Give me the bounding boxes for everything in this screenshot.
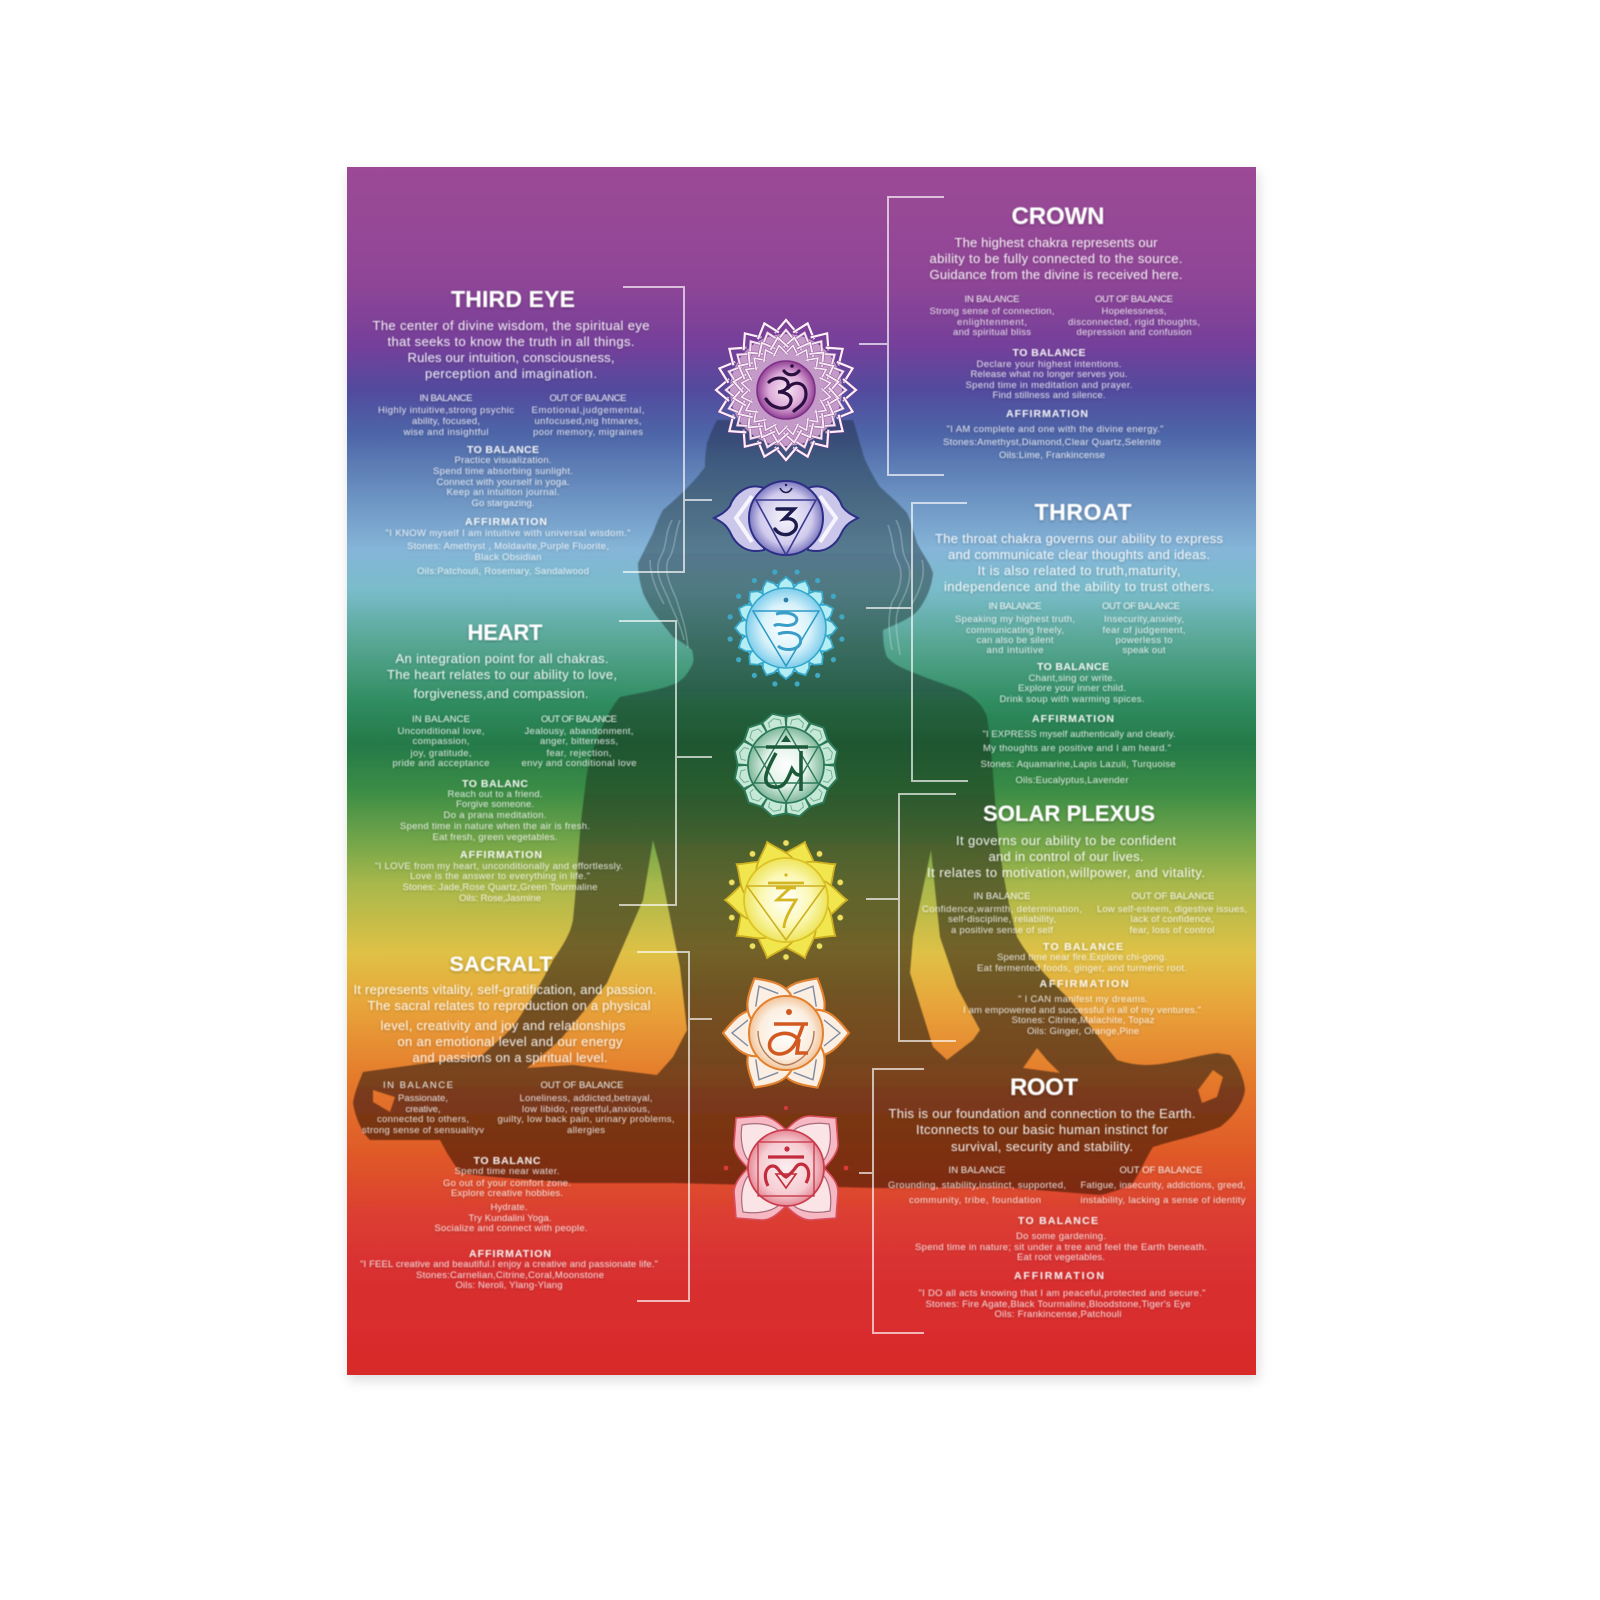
text: root affirmation — [918, 1270, 1206, 1320]
text: throat in balance — [955, 601, 1075, 656]
heading: root: ROOT — [1010, 1074, 1078, 1101]
text: solar plexus to balance: Eat fermented foods, ginger, and turmeric root. — [977, 963, 1187, 974]
text: solar plexus to balance: Spend time near fire.Explore chi-gong. — [997, 952, 1167, 963]
icon: third eye chakra — [714, 481, 858, 555]
text: solar plexus to balance: TO BALANCE — [1043, 941, 1123, 953]
text: crown out of balance: depression and confusion — [1076, 327, 1192, 338]
text: third eye in balance: wise and insightful — [402, 427, 488, 438]
heading: third eye: THIRD EYE — [451, 286, 575, 312]
text: sacral to balance: Explore creative hobbies. — [451, 1188, 563, 1199]
text: root in balance: community, tribe, foundation — [909, 1195, 1041, 1206]
text: solar plexus description: It relates to motivation,willpower, and vitality. — [927, 865, 1205, 880]
text: crown to balance: Declare your highest intentions. — [976, 359, 1122, 370]
text: crown affirmation: AFFIRMATION — [1006, 408, 1088, 420]
text: crown in balance: Strong sense of connection, — [930, 306, 1054, 317]
text: third eye description: that seeks to know the truth in all things. — [388, 334, 634, 349]
text: sacral description: The sacral relates to reproduction on a physical — [368, 998, 651, 1013]
text: heart in balance: IN BALANCE — [412, 714, 470, 725]
text: throat in balance: can also be silent — [976, 635, 1054, 646]
text: root in balance — [888, 1165, 1066, 1206]
text: solar plexus description: and in control of our lives. — [988, 849, 1144, 864]
text: sacral description: It represents vitality, self-gratification, and passion. — [354, 982, 656, 997]
text: heart description: forgiveness,and compassion. — [414, 686, 588, 701]
text: crown in balance — [930, 294, 1054, 338]
text: throat affirmation: Oils:Eucalyptus,Lavender — [1016, 775, 1128, 786]
text: third eye out of balance: OUT OF BALANCE — [550, 393, 626, 404]
text: solar plexus out of balance: Low self-esteem, digestive issues, — [1097, 904, 1247, 915]
text: throat description: and communicate clear thoughts and ideas. — [948, 547, 1210, 562]
text: throat affirmation: Stones: Aquamarine,Lapis Lazuli, Turquoise — [980, 759, 1176, 770]
text: heart to balance: Reach out to a friend. — [448, 789, 542, 800]
text: heart in balance: joy, gratitude, — [410, 748, 472, 759]
text: sacral to balance: Go out of your comfort zone. — [443, 1178, 571, 1189]
text: crown to balance: Release what no longer serves you. — [970, 369, 1128, 380]
text: root description: Itconnects to our basic human instinct for — [916, 1122, 1169, 1137]
text: root out of balance: instability, lacking a sense of identity — [1080, 1195, 1246, 1206]
text: throat out of balance: fear of judgement, — [1102, 625, 1186, 636]
text: throat affirmation: My thoughts are positive and I am heard." — [983, 743, 1171, 754]
text: throat affirmation: AFFIRMATION — [1032, 713, 1114, 725]
text: solar plexus in balance: a positive sense of self — [951, 925, 1053, 936]
text: throat to balance — [1000, 661, 1144, 705]
text: throat out of balance: OUT OF BALANCE — [1102, 601, 1180, 612]
text: heart affirmation: Stones: Jade,Rose Quartz,Green Tourmaline — [402, 882, 598, 893]
text: throat to balance: Explore your inner child. — [1018, 683, 1126, 694]
text: root description — [888, 1106, 1196, 1154]
text: heart out of balance: Jealousy, abandonment, — [524, 726, 634, 737]
text: third eye description: perception and imagination. — [425, 366, 597, 381]
text: crown in balance: enlightenment, — [957, 317, 1027, 328]
text: solar plexus affirmation: AFFIRMATION — [1040, 978, 1128, 990]
text: heart in balance: compassion, — [412, 736, 470, 747]
text: throat description: independence and the ability to trust others. — [944, 579, 1214, 594]
text: heart to balance: Eat fresh, green vegetables. — [432, 832, 558, 843]
text: sacral out of balance — [498, 1080, 674, 1136]
text: crown description: Guidance from the divine is received here. — [930, 267, 1182, 282]
icon: heart chakra — [732, 711, 840, 819]
text: throat in balance: and intuitive — [986, 645, 1044, 656]
text: root in balance: Grounding, stability,instinct, supported, — [888, 1180, 1066, 1191]
text: throat out of balance: Insecurity,anxiety, — [1104, 614, 1184, 625]
text: throat description — [935, 531, 1224, 594]
text: third eye to balance: TO BALANCE — [467, 444, 539, 456]
text: third eye affirmation: Oils:Patchouli, Rosemary, Sandalwood — [417, 566, 589, 577]
text: third eye out of balance: Emotional,judgemental, — [532, 405, 644, 416]
text: heart affirmation: "I LOVE from my heart, unconditionally and effortlessly. — [375, 861, 623, 872]
text: sacral affirmation: Stones:Carnelian,Citrine,Coral,Moonstone — [416, 1270, 604, 1281]
text: sacral in balance: IN BALANCE — [383, 1080, 453, 1091]
text: root affirmation: AFFIRMATION — [1014, 1270, 1104, 1282]
text: third eye in balance: IN BALANCE — [420, 393, 472, 404]
text: heart to balance — [400, 778, 590, 843]
text: third eye affirmation — [386, 516, 630, 577]
text: solar plexus out of balance: OUT OF BALANCE — [1132, 891, 1214, 902]
text: third eye to balance: Spend time absorbing sunlight. — [433, 466, 573, 477]
text: throat in balance: communicating freely, — [966, 625, 1064, 636]
text: throat description: It is also related to truth,maturity, — [978, 563, 1180, 578]
text: heart out of balance: envy and conditional love — [522, 758, 636, 769]
text: solar plexus out of balance: fear, loss of control — [1130, 925, 1214, 936]
text: solar plexus affirmation: Oils: Ginger, Orange,Pine — [1027, 1026, 1139, 1037]
text: solar plexus out of balance — [1097, 891, 1247, 936]
text: sacral to balance: Spend time near water. — [454, 1166, 560, 1177]
text: sacral in balance: connected to others, — [377, 1114, 469, 1125]
text: sacral affirmation: "I FEEL creative and beautiful.I enjoy a creative and passionate life." — [360, 1259, 658, 1270]
text: third eye to balance — [433, 444, 573, 509]
text: sacral out of balance: allergies — [567, 1125, 605, 1136]
text: heart to balance: Forgive someone. — [456, 799, 534, 810]
text: root affirmation: Oils: Frankincense,Patchouli — [994, 1309, 1122, 1320]
text: solar plexus to balance — [977, 941, 1187, 974]
text: solar plexus in balance: Confidence,warmth, determination, — [922, 904, 1082, 915]
icon: root chakra — [724, 1106, 848, 1230]
text: sacral to balance: Hydrate. — [490, 1202, 528, 1213]
text: third eye description — [372, 318, 650, 381]
panel: crown — [930, 203, 1200, 461]
text: root to balance: TO BALANCE — [1018, 1215, 1098, 1227]
text: root to balance: Do some gardening. — [1016, 1231, 1106, 1242]
text: crown description: ability to be fully connected to the source. — [930, 251, 1182, 266]
text: heart affirmation: Love is the answer to everything in life." — [410, 871, 590, 882]
text: third eye in balance: ability, focused, — [412, 416, 480, 427]
text: root to balance — [915, 1215, 1207, 1263]
text: heart in balance: pride and acceptance — [392, 758, 490, 769]
text: sacral out of balance: Loneliness, addicted,betrayal, — [520, 1093, 652, 1104]
text: third eye to balance: Practice visualization. — [454, 455, 552, 466]
panel: heart — [375, 620, 636, 904]
text: solar plexus in balance: IN BALANCE — [974, 891, 1030, 902]
text: third eye description: Rules our intuition, consciousness, — [408, 350, 614, 365]
text: solar plexus affirmation: " I CAN manifest my dreams. — [1018, 994, 1148, 1005]
text: root to balance: Eat root vegetables. — [1017, 1252, 1105, 1263]
text: sacral affirmation: Oils: Neroli, Ylang-Ylang — [456, 1280, 562, 1291]
text: throat description: The throat chakra governs our ability to express — [935, 531, 1224, 546]
text: sacral to balance: Try Kundalini Yoga. — [468, 1213, 552, 1224]
text: heart out of balance: OUT OF BALANCE — [541, 714, 617, 725]
text: throat to balance: Drink soup with warming spices. — [1000, 694, 1144, 705]
text: root description: This is our foundation and connection to the Earth. — [888, 1106, 1196, 1121]
text: third eye to balance: Connect with yourself in yoga. — [436, 477, 570, 488]
text: heart to balance: Do a prana meditation. — [444, 810, 546, 821]
heading: heart: HEART — [468, 620, 543, 645]
text: crown affirmation: "I AM complete and one with the divine energy." — [946, 424, 1164, 435]
text: solar plexus description: It governs our ability to be confident — [956, 833, 1176, 848]
text: solar plexus affirmation — [963, 978, 1201, 1037]
text: heart out of balance — [522, 714, 636, 769]
panel: solar plexus — [922, 801, 1247, 1037]
text: sacral out of balance: low libido, regretful,anxious, — [522, 1104, 650, 1115]
text: sacral out of balance: OUT OF BALANCE — [540, 1080, 624, 1091]
text: third eye affirmation: AFFIRMATION — [465, 516, 547, 528]
text: root out of balance: OUT OF BALANCE — [1120, 1165, 1202, 1176]
text: heart description: An integration point for all chakras. — [396, 651, 608, 666]
text: third eye out of balance: poor memory, migraines — [533, 427, 643, 438]
bracket: solar plexus — [866, 794, 956, 1041]
text: third eye affirmation: Black Obsidian — [474, 552, 542, 563]
text: sacral to balance: TO BALANC — [474, 1155, 541, 1167]
text: sacral affirmation — [360, 1248, 658, 1291]
bracket: third eye — [623, 287, 712, 572]
bracket: root — [859, 1069, 924, 1333]
text: third eye in balance: Highly intuitive,strong psychic — [378, 405, 514, 416]
text: throat to balance: TO BALANCE — [1037, 661, 1109, 673]
text: root description: survival, security and stability. — [951, 1139, 1133, 1154]
text: heart out of balance: fear, rejection, — [546, 748, 612, 759]
text: crown to balance — [966, 347, 1132, 401]
text: solar plexus affirmation: I am empowered and successful in all of my ventures." — [963, 1005, 1201, 1016]
text: sacral description: and passions on a spiritual level. — [412, 1050, 608, 1065]
bracket: heart — [619, 621, 712, 905]
text: solar plexus affirmation: Stones: Citrine,Malachite, Topaz — [1012, 1015, 1155, 1026]
text: crown to balance: TO BALANCE — [1012, 347, 1086, 359]
text: sacral description: on an emotional level and our energy — [398, 1034, 623, 1049]
text: sacral to balance: Socialize and connect with people. — [434, 1223, 588, 1234]
text: root affirmation: Stones: Fire Agate,Black Tourmaline,Bloodstone,Tiger's Eye — [926, 1299, 1190, 1310]
text: third eye out of balance: unfocused,nig htmares, — [534, 416, 642, 427]
text: crown description: The highest chakra represents our — [954, 235, 1158, 250]
text: sacral out of balance: guilty, low back pain, urinary problems, — [498, 1114, 674, 1125]
icon: throat chakra — [727, 569, 845, 687]
text: throat out of balance: speak out — [1122, 645, 1166, 656]
text: crown to balance: Spend time in meditation and prayer. — [966, 380, 1132, 391]
text: sacral in balance: creative, — [406, 1104, 440, 1115]
text: root in balance: IN BALANCE — [948, 1165, 1006, 1176]
text: crown description — [930, 235, 1182, 282]
text: heart in balance: Unconditional love, — [398, 726, 484, 737]
text: throat affirmation: "I EXPRESS myself authentically and clearly. — [982, 729, 1176, 740]
text: sacral affirmation: AFFIRMATION — [469, 1248, 551, 1260]
text: crown affirmation: Stones:Amethyst,Diamond,Clear Quartz,Selenite — [943, 437, 1161, 448]
text: crown affirmation: Oils:Lime, Frankincense — [999, 450, 1105, 461]
text: crown to balance: Find stillness and silence. — [992, 390, 1106, 401]
text: heart affirmation: Oils: Rose,Jasmine — [459, 893, 541, 904]
text: root out of balance — [1080, 1165, 1246, 1206]
icon: crown chakra — [694, 308, 872, 484]
text: throat in balance: Speaking my highest truth, — [955, 614, 1075, 625]
text: root affirmation: "I DO all acts knowing that I am peaceful,protected and secure." — [918, 1288, 1206, 1299]
text: third eye in balance — [378, 393, 514, 438]
bracket: throat — [866, 503, 968, 781]
bracket: sacral — [637, 952, 712, 1301]
text: crown out of balance: OUT OF BALANCE — [1095, 294, 1173, 305]
text: solar plexus description — [927, 833, 1205, 880]
text: crown out of balance: Hopelessness, — [1102, 306, 1166, 317]
text: heart to balance: TO BALANC — [462, 778, 528, 790]
text: sacral description: level, creativity and joy and relationships — [380, 1018, 626, 1033]
panel: third eye — [372, 286, 650, 577]
text: sacral in balance: Passionate, — [398, 1093, 448, 1104]
text: solar plexus in balance — [922, 891, 1082, 936]
text: third eye affirmation: "I KNOW myself I am intuitive with universal wisdom." — [386, 528, 630, 539]
text: heart to balance: Spend time in nature when the air is fresh. — [400, 821, 590, 832]
text: throat out of balance: powerless to — [1116, 635, 1172, 646]
text: throat affirmation — [980, 713, 1176, 786]
silhouette: meditating figure — [353, 420, 1245, 1195]
text: heart affirmation — [375, 849, 623, 904]
text: solar plexus in balance: self-discipline, reliability, — [948, 914, 1056, 925]
text: heart affirmation: AFFIRMATION — [460, 849, 542, 861]
text: heart description — [387, 651, 617, 701]
text: sacral to balance — [434, 1155, 588, 1234]
text: heart out of balance: anger, bitterness, — [540, 736, 618, 747]
text: crown in balance: IN BALANCE — [964, 294, 1020, 305]
heading: throat: THROAT — [1034, 499, 1132, 525]
text: root to balance: Spend time in nature; sit under a tree and feel the Earth beneath. — [915, 1242, 1207, 1253]
text: sacral description — [354, 982, 656, 1065]
icon: sacral chakra — [723, 967, 849, 1099]
text: sacral in balance — [362, 1080, 484, 1136]
text: third eye description: The center of divine wisdom, the spiritual eye — [372, 318, 650, 333]
text: crown affirmation — [943, 408, 1164, 461]
text: crown in balance: and spiritual bliss — [953, 327, 1031, 338]
text: heart description: The heart relates to our ability to love, — [387, 667, 617, 682]
panel: root — [888, 1074, 1246, 1320]
panel: throat — [935, 499, 1224, 786]
text: third eye affirmation: Stones: Amethyst , Moldavite,Purple Fluorite, — [407, 541, 609, 552]
panel: sacral — [354, 952, 674, 1291]
text: crown out of balance: disconnected, rigid thoughts, — [1068, 317, 1200, 328]
text: root out of balance: Fatigue, insecurity, addictions, greed, — [1080, 1180, 1246, 1191]
text: heart in balance — [392, 714, 490, 769]
heading: solar plexus: SOLAR PLEXUS — [983, 801, 1155, 826]
poster background — [347, 167, 1256, 1375]
icon: solar plexus chakra — [724, 835, 848, 965]
bracket: crown — [859, 197, 944, 475]
text: solar plexus out of balance: lack of confidence, — [1130, 914, 1214, 925]
heading: crown: CROWN — [1012, 203, 1104, 230]
text: third eye to balance: Keep an intuition journal. — [446, 487, 560, 498]
text: sacral in balance: strong sense of sensualityv — [362, 1125, 484, 1136]
text: third eye to balance: Go stargazing. — [472, 498, 534, 509]
text: crown out of balance — [1068, 294, 1200, 338]
text: throat to balance: Chant,sing or write. — [1028, 673, 1116, 684]
heading: sacral: SACRALT — [450, 952, 552, 976]
text: third eye out of balance — [532, 393, 644, 438]
text: throat out of balance — [1102, 601, 1186, 656]
text: throat in balance: IN BALANCE — [988, 601, 1042, 612]
